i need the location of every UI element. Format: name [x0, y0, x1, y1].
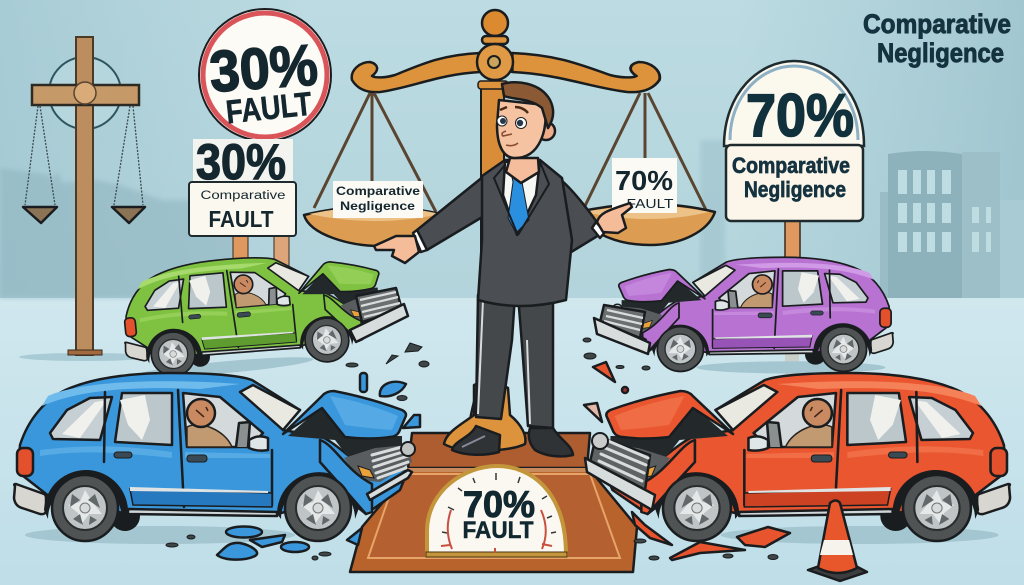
- sign: 70% comparative negligence: Negligence: [744, 177, 846, 202]
- sign: 70% comparative negligence: 70%: [746, 82, 854, 149]
- left pan chains and pan: [304, 93, 445, 246]
- gauge: 70% fault: 70%: [463, 484, 535, 525]
- title: Comparative Negligence: [863, 9, 1011, 68]
- sign: 30% comparative fault: [189, 134, 296, 266]
- large balance scale: [304, 10, 715, 422]
- right pan chains and pan: FAULT: [626, 196, 674, 211]
- left pan chains and pan: Negligence: [340, 201, 415, 213]
- red car: [585, 373, 1010, 544]
- sign: 70% comparative negligence: Comparative: [732, 153, 850, 178]
- left arm and pointing hand: [374, 176, 484, 263]
- hazy skyline: right buildings: [700, 140, 1024, 298]
- green car front bumper and grille: [350, 288, 408, 342]
- wooden platform: [350, 433, 637, 572]
- red car front bumper and grille: [585, 433, 655, 510]
- sign: 30% fault circle: 30%: [208, 32, 320, 105]
- right pan chains and pan: 70%: [615, 165, 673, 196]
- scattered dark debris right: [583, 338, 778, 560]
- left cross-shaped scale of justice: [19, 37, 151, 361]
- left pan chains and pan: Comparative: [336, 186, 420, 198]
- head: [497, 82, 555, 183]
- traffic cone: [808, 500, 867, 581]
- right pan chains and pan: [578, 93, 715, 245]
- bell-shaped scale base behind legs: [444, 382, 525, 451]
- gauge: 70% fault: FAULT: [462, 517, 534, 544]
- green car: [117, 245, 408, 382]
- shirt and tie: [494, 160, 549, 235]
- sign: 30% comparative fault: Comparative: [200, 190, 286, 202]
- right arm and pointing hand: [552, 176, 632, 254]
- blue car debris: [217, 373, 420, 560]
- blue car: [14, 373, 415, 544]
- gauge: 70% fault: [426, 466, 567, 557]
- sign: 70% comparative negligence: [724, 61, 864, 374]
- title: Comparative Negligence: Negligence: [877, 38, 1004, 68]
- hazy skyline: left: [0, 168, 235, 298]
- sign: 30% comparative fault: FAULT: [208, 206, 274, 232]
- jacket: [478, 160, 572, 306]
- trousers: [476, 295, 553, 428]
- purple car front bumper and grille: [594, 305, 650, 354]
- title: Comparative Negligence: Comparative: [863, 9, 1011, 39]
- man in a suit: [374, 82, 632, 456]
- scattered dark debris left: [166, 343, 429, 560]
- red car debris: [584, 362, 790, 560]
- shoes: [452, 426, 573, 456]
- sign: 30% comparative fault: 30%: [196, 134, 286, 190]
- sign: 30% fault circle: FAULT: [224, 85, 313, 130]
- sign: 30% fault circle: [199, 9, 331, 141]
- purple car: [594, 257, 893, 374]
